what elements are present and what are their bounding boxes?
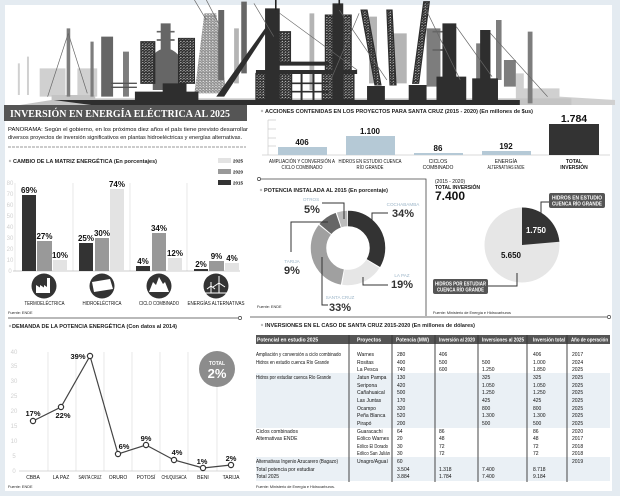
- table row: Seripona: 2025: [572, 383, 583, 389]
- table row: Guaracachi: 2020: [572, 429, 583, 435]
- table row: Eólico Warnes: 48: [439, 436, 445, 442]
- bar chart: termoeléctrica: 69%: [21, 186, 37, 195]
- table row: Peña Blanca: Peña Blanca: [357, 413, 386, 419]
- axis: [268, 120, 276, 155]
- table row: Rositas: Rositas: [357, 360, 374, 366]
- table row: Peña Blanca: 2025: [572, 413, 583, 419]
- y axis: [7, 181, 240, 275]
- table row: Eólico El Dorado: Eólico El Dorado: [357, 444, 388, 450]
- table header: Proyectos: [357, 338, 381, 344]
- pie chart: 5.650: [501, 251, 522, 260]
- table row: Seripona: 420: [397, 383, 406, 389]
- table row: Warnes: 406: [533, 352, 542, 358]
- heading: total inversión: (2015 - 2020): [435, 179, 465, 185]
- y axis: 40: [7, 225, 14, 231]
- table row: total potencia por estudiar: 7.400: [482, 467, 495, 473]
- donut labels: TARIJA: [284, 259, 301, 264]
- callout: hidros en estudio: CUENCA RÍO GRANDE: [552, 200, 603, 208]
- table row: Jatun Pampa: Hidros por estudiar cuenca Río Grande: [256, 375, 331, 381]
- table row: Warnes: 280: [397, 352, 406, 358]
- source: Fuente: ENDE: [8, 485, 33, 489]
- intro text: diversos proyectos de inversión significativos en plantas hidroeléctricas y energías alternativas.: [8, 135, 242, 141]
- category labels: TERMOELÉCTRICA: [24, 300, 65, 307]
- table row: Eólico San Julián: [357, 451, 583, 457]
- donut labels: LA PAZ: [394, 273, 410, 278]
- line chart: 39%: [70, 352, 86, 361]
- donut labels: OTROS: [303, 197, 319, 202]
- bar chart: inversiones: 1.100: [360, 127, 381, 136]
- table row: Rositas: 500: [439, 360, 448, 366]
- heading: total inversión: [435, 179, 480, 203]
- legend: [218, 158, 244, 186]
- y axis: 0: [8, 269, 12, 275]
- table row: Peña Blanca: 520: [397, 413, 406, 419]
- table row: Jatun Pampa: 325: [533, 375, 542, 381]
- pie chart: [484, 207, 560, 282]
- chart axis: 10: [11, 439, 18, 445]
- table row: total 2025: 9.184: [533, 474, 546, 480]
- table row: Eólico San Julián: 72: [533, 451, 539, 457]
- bar labels: CICLO COMBINADO: [282, 165, 323, 171]
- icon: wind turbines: [204, 274, 228, 298]
- y axis: 30: [7, 236, 14, 242]
- table row: Las Juntas: 170: [397, 398, 406, 404]
- table row: La Pesca: 740: [397, 367, 406, 373]
- table row: Las Juntas: 2025: [572, 398, 583, 404]
- panel: total inversión: [433, 179, 605, 315]
- city labels: CBBA: [26, 475, 40, 481]
- table row: Unagro: 2019: [572, 459, 583, 465]
- chart axis: 35: [11, 364, 18, 370]
- source: Fuente: Ministerio de Energía e Hidrocarburos: [433, 311, 511, 315]
- bar chart: hidroeléctrica: [78, 180, 125, 271]
- y axis: 70: [7, 192, 14, 198]
- donut labels: 19%: [391, 279, 413, 291]
- table row: total 2025: 1.784: [439, 474, 452, 480]
- category labels: CICLO COMBINADO: [139, 301, 179, 307]
- bar chart: inversiones: 1.784: [561, 113, 587, 125]
- chart axis: 15: [11, 424, 18, 430]
- table row: Pirapó: 200: [397, 421, 406, 427]
- icon: mountains: [146, 274, 172, 298]
- table row: Las Juntas: 425: [533, 398, 542, 404]
- table row: Cañahuaical: 2025: [572, 390, 583, 396]
- table row: Eólico Warnes: Alternativas ENDE: [256, 436, 298, 442]
- source: Fuente: Ministerio de Energía e Hidrocarburos.: [256, 485, 335, 489]
- table row: Pirapó: Pirapó: [357, 421, 372, 427]
- bar labels: ALTERNATIVAS ENDE: [488, 165, 525, 171]
- bar chart: termoeléctrica: [21, 186, 68, 271]
- city labels: CHUQUISACA: [162, 475, 187, 481]
- donut chart: [318, 218, 378, 278]
- line chart: 6%: [119, 442, 130, 451]
- bar labels: COMBINADO: [423, 165, 454, 171]
- table row: Eólico El Dorado: 2018: [572, 444, 583, 450]
- callout: total 2%: 2%: [208, 366, 227, 381]
- bar labels: AMPLIACIÓN Y CONVERSIÓN A: [269, 158, 336, 165]
- table row: Eólico Warnes: 20: [397, 436, 403, 442]
- bar labels: HIDROS EN ESTUDIO CUENCA: [338, 159, 402, 165]
- table row: Cañahuaical: 1.250: [533, 390, 546, 396]
- heading: demanda: DEMANDA DE LA POTENCIA ENERGÉTICA (Con datos al 2014): [12, 322, 177, 330]
- table header: Año de operación: [571, 338, 608, 344]
- table row: La Pesca: La Pesca: [357, 367, 378, 373]
- panel: cambio de la matriz energética: [7, 157, 245, 315]
- table row: Seripona: [357, 383, 583, 389]
- category labels: HIDROELÉCTRICA: [82, 300, 122, 307]
- heading: acciones: ACCIONES CONTENIDAS EN LOS PROYECTOS PARA SANTA CRUZ (2015 - 2020) (En millones de $us): [265, 109, 533, 115]
- source: Fuente: ENDE: [257, 305, 282, 309]
- table row: Guaracachi: Ciclos combinados: [256, 429, 298, 435]
- callout: hidros por estudiar: [433, 273, 517, 294]
- table header: [256, 335, 610, 344]
- bar chart: inversiones: 86: [434, 144, 443, 153]
- table row: Unagro: Alternativas Ingenio Azucarero (Bagazo): [256, 459, 338, 465]
- table row: Ocampo: 2025: [572, 406, 583, 412]
- pie chart: 1.750: [526, 226, 547, 235]
- table row: Rositas: 1.000: [533, 360, 546, 366]
- bar labels: TOTAL: [566, 159, 582, 165]
- category labels: [24, 300, 245, 307]
- donut labels: 33%: [329, 302, 351, 314]
- table row: Warnes: 406: [439, 352, 448, 358]
- bar labels: [269, 158, 588, 171]
- table header: Potencia (MW): [396, 338, 429, 344]
- line chart: [25, 352, 237, 471]
- table row: Las Juntas: Las Juntas: [357, 398, 382, 404]
- table row: Ocampo: 800: [482, 406, 491, 412]
- city labels: ORURO: [109, 475, 127, 481]
- intro text: [8, 127, 248, 141]
- city labels: SANTA CRUZ: [78, 475, 102, 481]
- bar chart: inversiones: [278, 113, 599, 155]
- table row: Cañahuaical: 500: [397, 390, 406, 396]
- table row: Jatun Pampa: Jatun Pampa: [357, 375, 387, 381]
- callout: hidros en estudio: [541, 193, 605, 215]
- legend: 2015: [233, 180, 244, 186]
- table row: Eólico El Dorado: 30: [397, 444, 403, 450]
- table row: Warnes: [256, 352, 583, 358]
- bar labels: ENERGÍA: [495, 158, 518, 165]
- heading: inversiones: INVERSIONES EN EL CASO DE SANTA CRUZ 2015-2020 (En millones de dólares): [265, 323, 475, 329]
- title banner: INVERSIÓN EN ENERGÍA ELÉCTRICA AL 2025: [10, 108, 230, 120]
- heading: total inversión: 7.400: [435, 189, 465, 203]
- table row: total 2025: 7.400: [482, 474, 495, 480]
- table row: La Pesca: 2025: [572, 367, 583, 373]
- callout: hidros en estudio: HIDROS EN ESTUDIO: [552, 196, 602, 202]
- bar chart: ciclo combinado: 12%: [167, 249, 183, 258]
- panel: acciones contenidas en los proyectos: [261, 109, 610, 171]
- callout: hidros por estudiar: HIDROS POR ESTUDIAR: [435, 282, 486, 288]
- table row: Rositas: Hidros en estudio cuenca Río Grande: [256, 360, 329, 366]
- bar chart: inversiones: 406: [295, 138, 309, 147]
- table row: Guaracachi: 86: [439, 429, 445, 435]
- table row: Rositas: [256, 360, 583, 366]
- table row: Cañahuaical: 1.250: [482, 390, 495, 396]
- table row: Warnes: Ampliación y conversión a ciclo combinado: [256, 352, 341, 358]
- table row: total 2025: Total 2025: [256, 474, 279, 480]
- heading: matriz energética: CAMBIO DE LA MATRIZ ENERGÉTICA (En porcentajes): [13, 157, 157, 165]
- table row: Ocampo: 320: [397, 406, 406, 412]
- table row: Jatun Pampa: 2025: [572, 375, 583, 381]
- icon: factory: [32, 274, 56, 298]
- table row: Eólico San Julián: Eólico San Julián: [357, 451, 390, 457]
- chart axis: 20: [11, 409, 18, 415]
- callout: total 2%: TOTAL: [209, 361, 225, 367]
- table header: Inversión total: [533, 338, 566, 344]
- table row: Pirapó: 500: [482, 421, 491, 427]
- line chart: 2%: [226, 454, 237, 463]
- table row: La Pesca: 1.250: [482, 367, 495, 373]
- table row: Eólico El Dorado: [357, 444, 583, 450]
- table row: Ocampo: 800: [533, 406, 542, 412]
- donut labels: COCHABAMBA: [387, 202, 420, 207]
- table row: Unagro: Unagro/Aguaí: [357, 459, 388, 465]
- table row: Peña Blanca: [357, 413, 583, 419]
- bar chart: hidroeléctrica: 74%: [109, 180, 125, 189]
- city labels: [26, 474, 240, 481]
- table row: Las Juntas: 425: [482, 398, 491, 404]
- table row: total 2025: [256, 474, 546, 480]
- table row: Las Juntas: [357, 398, 583, 404]
- bar chart: hidroeléctrica: 30%: [94, 229, 110, 238]
- panel: inversiones en Santa Cruz: [256, 323, 610, 489]
- table row: Eólico El Dorado: 72: [533, 444, 539, 450]
- table row: Eólico Warnes: [256, 436, 583, 442]
- table row: Guaracachi: Guaracachi: [357, 429, 383, 435]
- y axis: 50: [7, 214, 14, 220]
- bar chart: termoeléctrica: 10%: [52, 251, 68, 260]
- city labels: TARIJA: [223, 475, 240, 481]
- table row: Eólico San Julián: 72: [439, 451, 445, 457]
- table row: total potencia por estudiar: [256, 467, 546, 473]
- bar chart: termoeléctrica: 27%: [36, 232, 53, 241]
- table row: Seripona: 1.050: [533, 383, 546, 389]
- table row: Jatun Pampa: [256, 375, 583, 381]
- illustration: industrial skyline: [18, 0, 615, 105]
- table row: Jatun Pampa: 325: [482, 375, 491, 381]
- table row: total potencia por estudiar: 3.504: [397, 467, 410, 473]
- table row: Ocampo: Ocampo: [357, 406, 376, 412]
- table column rules: [349, 335, 567, 482]
- y axis: 20: [7, 247, 14, 253]
- bar chart: inversiones: 192: [499, 142, 513, 151]
- bar labels: CICLOS: [429, 159, 448, 165]
- table row: Eólico Warnes: 2017: [572, 436, 583, 442]
- bar chart: ciclo combinado: 34%: [151, 224, 167, 233]
- chart axis: 5: [12, 454, 16, 460]
- callout: total 2%: [199, 351, 235, 387]
- table row: Ocampo: [357, 406, 583, 412]
- table row: Peña Blanca: 1.300: [482, 413, 495, 419]
- table header: Potencial en estudio 2025: [257, 338, 318, 344]
- bar chart: energías alternativas: [194, 252, 239, 271]
- bar chart: energías alternativas: 4%: [226, 254, 238, 263]
- chart axis: 30: [11, 379, 18, 385]
- y axis: 10: [7, 258, 14, 264]
- divider: [8, 317, 238, 319]
- callout: hidros por estudiar: CUENCA RÍO GRANDE: [437, 286, 485, 294]
- line chart: 22%: [55, 411, 71, 420]
- donut labels: SANTA CRUZ: [326, 295, 355, 300]
- table row: Warnes: 2017: [572, 352, 583, 358]
- table row: Guaracachi: 64: [397, 429, 403, 435]
- bar chart: energías alternativas: 9%: [211, 252, 222, 261]
- table row: total potencia por estudiar: 1.318: [439, 467, 452, 473]
- donut labels: 9%: [284, 265, 300, 277]
- bar chart: ciclo combinado: [136, 224, 183, 271]
- table row: Eólico Warnes: 48: [533, 436, 539, 442]
- table row: Rositas: 2024: [572, 360, 583, 366]
- table row: La Pesca: [357, 367, 583, 373]
- line chart: 1%: [197, 457, 208, 466]
- chart axis: 40: [11, 350, 18, 356]
- table row: Cañahuaical: Cañahuaical: [357, 390, 385, 396]
- heading: total inversión: TOTAL INVERSIÓN: [435, 183, 480, 191]
- chart axis: 25: [11, 394, 18, 400]
- table row: total 2025: 3.884: [397, 474, 410, 480]
- legend: 2020: [233, 170, 244, 174]
- source: Fuente: ENDE: [8, 311, 33, 315]
- heading: potencia: POTENCIA INSTALADA AL 2015 (En porcentaje): [264, 188, 388, 194]
- line chart: 9%: [141, 434, 152, 443]
- table row: La Pesca: 600: [439, 367, 448, 373]
- chart axis: 0: [12, 469, 16, 475]
- divider lines: [250, 179, 607, 317]
- table row: Warnes: Warnes: [357, 352, 375, 358]
- table header: Inversión al 2020: [439, 338, 475, 344]
- bar chart: ciclo combinado: 4%: [137, 257, 149, 266]
- table row: Seripona: 1.050: [482, 383, 495, 389]
- city labels: BENI: [197, 475, 209, 481]
- table row: Pirapó: 500: [533, 421, 542, 427]
- table row: Eólico Warnes: Eólico Warnes: [357, 436, 390, 442]
- legend: 2025: [233, 158, 244, 164]
- y axis: 80: [7, 181, 14, 187]
- bar chart: energías alternativas: 2%: [195, 260, 207, 269]
- table row: Rositas: 500: [482, 360, 491, 366]
- panel: demanda de la potencia energética: [8, 322, 240, 489]
- donut labels: 5%: [304, 204, 320, 216]
- bar labels: INVERSIÓN: [560, 163, 588, 171]
- table row: total potencia por estudiar: 8.718: [533, 467, 546, 473]
- chart axis: [11, 350, 240, 475]
- table row: Seripona: Seripona: [357, 383, 377, 389]
- table row: Rositas: 400: [397, 360, 406, 366]
- table row: Unagro: [256, 459, 583, 465]
- table row: Pirapó: [357, 421, 583, 427]
- table row: Cañahuaical: [357, 390, 583, 396]
- table row: Guaracachi: 86: [533, 429, 539, 435]
- table row: total potencia por estudiar: Total potencia por estudiar: [256, 467, 315, 473]
- table row: Eólico San Julián: 2018: [572, 451, 583, 457]
- bar labels: RÍO GRANDE: [356, 164, 384, 171]
- table row: Unagro: 60: [397, 459, 403, 465]
- donut labels: 34%: [392, 208, 414, 220]
- bar chart: hidroeléctrica: 25%: [78, 234, 94, 243]
- table row: Jatun Pampa: 130: [397, 375, 406, 381]
- line chart: 4%: [172, 448, 183, 457]
- table row: Pirapó: 2025: [572, 421, 583, 427]
- city labels: LA PAZ: [53, 475, 69, 481]
- table row: Eólico San Julián: 30: [397, 451, 403, 457]
- city labels: POTOSÍ: [137, 474, 156, 481]
- table header: Inversiones al 2025: [482, 338, 524, 344]
- intro text: PANORAMA: Según el gobierno, en los próximos diez años el país tiene previsto desarrollar: [8, 127, 248, 133]
- table row: La Pesca: 1.850: [533, 367, 546, 373]
- leader lines: [291, 203, 388, 305]
- y axis: 60: [7, 203, 14, 209]
- table row: Peña Blanca: 1.300: [533, 413, 546, 419]
- icon: dam: [90, 274, 114, 298]
- donut labels: [284, 197, 420, 314]
- table row: Eólico El Dorado: 72: [439, 444, 445, 450]
- table row: Guaracachi: [256, 429, 583, 435]
- table bands: [256, 373, 610, 481]
- line chart: 17%: [25, 409, 41, 418]
- panel: potencia instalada: [257, 188, 420, 314]
- category labels: ENERGÍAS ALTERNATIVAS: [188, 300, 245, 307]
